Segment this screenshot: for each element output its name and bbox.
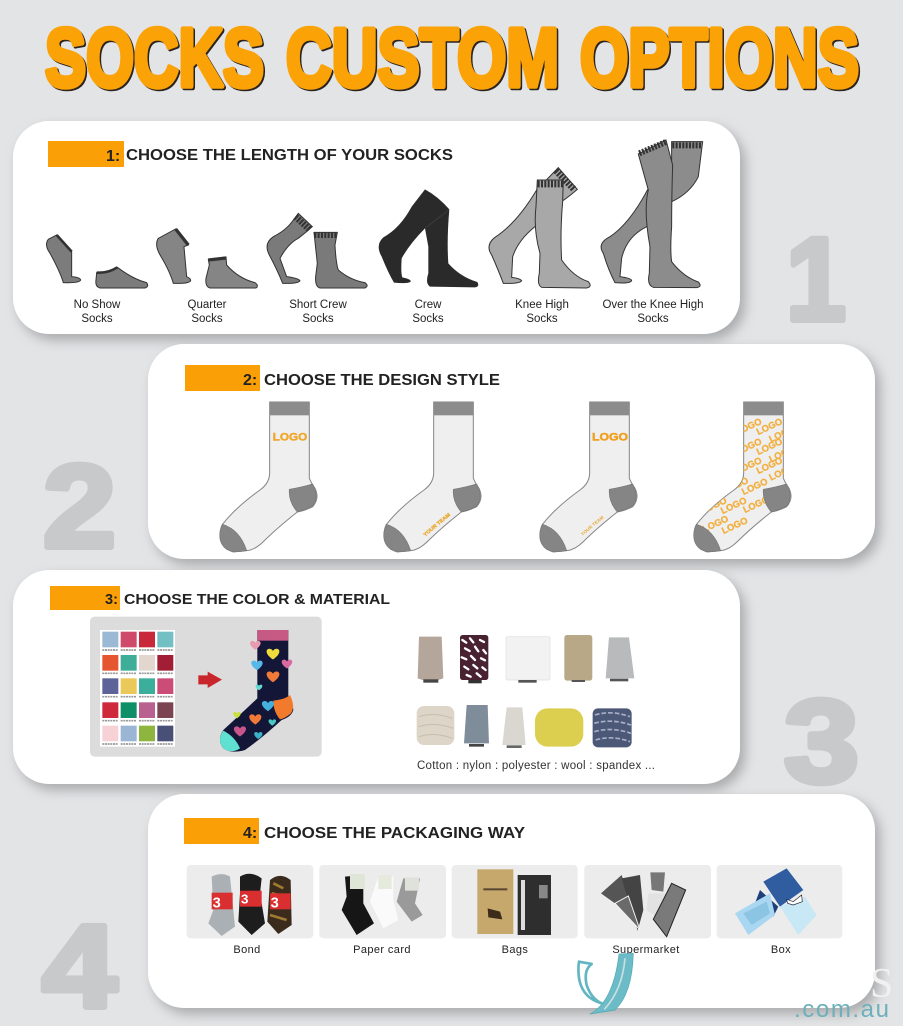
sock: all-over logo pattern: LOGO xyxy=(734,416,763,437)
heading: step 4: 4: xyxy=(243,825,257,842)
labels: packaging: Paper card xyxy=(353,944,411,956)
package: bags xyxy=(452,865,578,938)
labels: sock lengths: Socks xyxy=(526,313,558,325)
labels: sock lengths: No Show xyxy=(74,299,121,311)
icon: no show socks xyxy=(47,235,148,288)
step numeral 3: 3 xyxy=(784,676,859,808)
labels: sock lengths: Socks xyxy=(302,313,334,325)
sock: all-over logo pattern: LOGO xyxy=(741,494,771,515)
labels: sock lengths: Short Crew xyxy=(289,299,347,311)
labels: packaging: Bags xyxy=(502,944,528,956)
title: CUSTOM xyxy=(286,11,559,104)
sock: all-over logo pattern: LOGO xyxy=(767,462,797,483)
sock: text on sole: YOUR TEAM xyxy=(422,512,452,538)
sock: all-over logo pattern: LOGO xyxy=(701,514,730,534)
labels: packaging xyxy=(233,944,791,956)
heading: step 1 xyxy=(48,141,453,167)
yarn spools xyxy=(417,635,634,748)
heading: step 2: 2: xyxy=(243,372,257,389)
watermark text: .com.au xyxy=(794,996,891,1023)
title xyxy=(45,11,860,106)
panel: color and material xyxy=(13,570,740,784)
sock: text on sole xyxy=(384,402,481,552)
labels: sock lengths: Socks xyxy=(412,313,444,325)
watermark text: S xyxy=(870,961,893,1007)
icon: quarter socks xyxy=(157,229,257,288)
labels: sock lengths: Socks xyxy=(81,313,113,325)
labels: packaging: Box xyxy=(771,944,791,956)
sock: all-over logo pattern: LOGO xyxy=(740,476,769,497)
watermark logo xyxy=(578,953,633,1014)
heading: step 1: 1: xyxy=(106,148,120,165)
title: SOCKS xyxy=(46,12,266,106)
icon: over the knee socks xyxy=(601,140,703,288)
heading: step 4: CHOOSE THE PACKAGING WAY xyxy=(264,825,525,842)
step numeral 2: 2 xyxy=(43,441,116,573)
sock: all-over logo pattern: LOGO xyxy=(721,475,750,496)
icon: knee high socks xyxy=(489,168,590,288)
heading: step 2 xyxy=(185,365,500,391)
panel: packaging xyxy=(148,794,875,1008)
sock: logo on leg and sole: YOUR TEAM xyxy=(580,514,605,537)
package: bond: 3 xyxy=(241,891,248,906)
sock: all-over logo pattern xyxy=(694,402,797,552)
heading: step 1: CHOOSE THE LENGTH OF YOUR SOCKS xyxy=(126,147,453,164)
sock: all-over logo pattern: LOGO xyxy=(734,436,763,457)
package: box xyxy=(717,865,842,938)
sock: logo on leg and sole: LOGO xyxy=(592,431,628,443)
heading: step 4 xyxy=(184,818,525,844)
sock: all-over logo pattern: LOGO xyxy=(734,455,763,476)
labels: packaging: Supermarket xyxy=(612,944,680,956)
sock: all-over logo pattern: LOGO xyxy=(755,455,784,476)
sock: all-over logo pattern: LOGO xyxy=(767,424,797,444)
sock: all-over logo pattern: LOGO xyxy=(720,515,749,536)
labels: sock lengths xyxy=(74,299,704,325)
title: SOCKS xyxy=(45,11,264,104)
labels: packaging: Bond xyxy=(233,944,261,956)
title: CUSTOM xyxy=(288,12,560,106)
icon: crew socks xyxy=(379,189,478,287)
panel: design style xyxy=(148,344,875,559)
labels: sock lengths: Crew xyxy=(415,299,442,311)
sock: logo on leg: LOGO xyxy=(273,431,308,443)
heading: step 3: CHOOSE THE COLOR & MATERIAL xyxy=(124,592,390,608)
sock: logo on leg and sole xyxy=(540,402,637,552)
color swatches xyxy=(100,630,175,747)
step numeral 1: 1 xyxy=(786,214,846,346)
sock: all-over logo pattern: LOGO xyxy=(719,495,748,516)
package: bond: 3 xyxy=(271,895,279,911)
caption: materials: Cotton : nylon : polyester : wool : spandex ... xyxy=(417,760,655,772)
panel: sock length xyxy=(13,121,740,334)
sock: all-over logo pattern: LOGO xyxy=(767,444,797,464)
labels: sock lengths: Quarter xyxy=(188,299,227,311)
sock: all-over logo pattern: LOGO xyxy=(755,416,784,437)
heading: step 3 xyxy=(50,586,390,610)
heading: step 2: CHOOSE THE DESIGN STYLE xyxy=(264,372,500,389)
labels: sock lengths: Knee High xyxy=(515,299,569,311)
sock: all-over logo pattern: LOGO xyxy=(755,436,784,457)
heading: step 3: 3: xyxy=(105,592,118,608)
icon: heart sock xyxy=(220,630,293,752)
labels: sock lengths: Over the Knee High xyxy=(602,299,704,311)
labels: sock lengths: Socks xyxy=(191,313,223,325)
color chart and sock card xyxy=(90,617,322,757)
labels: sock lengths: Socks xyxy=(637,313,669,325)
sock: logo on leg xyxy=(220,402,317,552)
watermark text xyxy=(794,961,893,1023)
sock: all-over logo pattern: LOGO xyxy=(699,495,728,516)
package: paper card xyxy=(319,865,446,938)
package: bond xyxy=(187,865,313,938)
icon: short crew socks xyxy=(267,213,367,288)
icon: red arrow xyxy=(198,672,222,688)
package: supermarket xyxy=(584,865,711,938)
package: bond: 3 xyxy=(213,895,221,911)
